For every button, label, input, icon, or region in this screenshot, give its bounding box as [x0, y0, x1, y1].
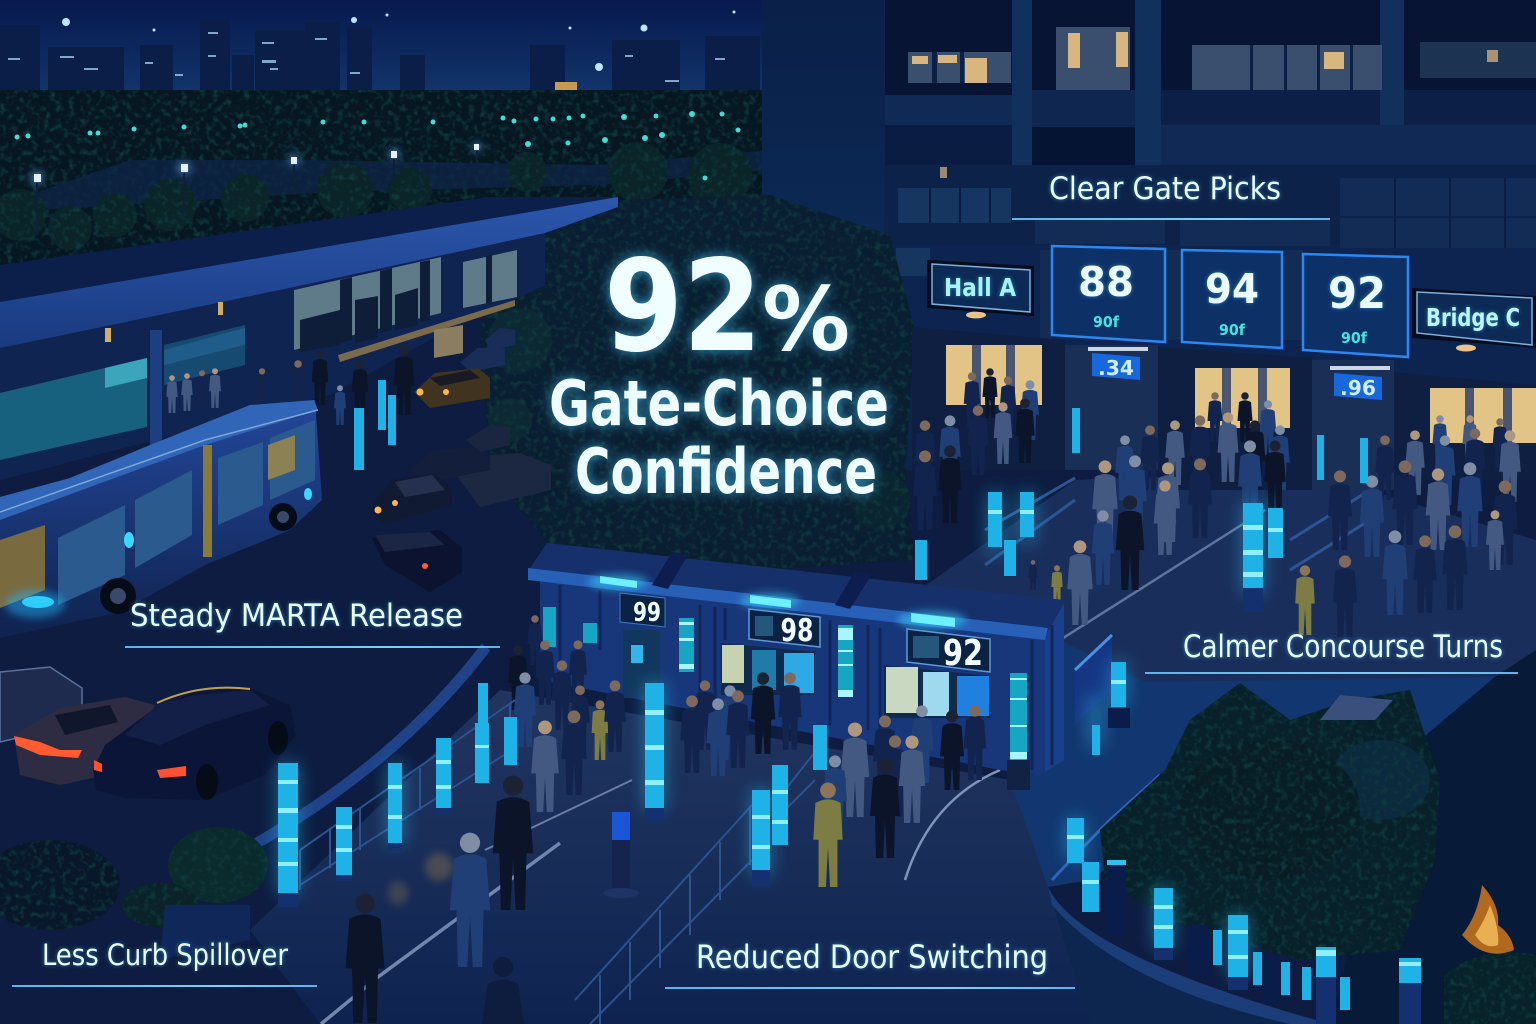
gate sign: Hall A: Hall A	[944, 273, 1017, 302]
booth building	[528, 543, 1064, 790]
caption: Steady MARTA Release: Steady MARTA Release	[130, 598, 463, 634]
lower windows	[896, 188, 1011, 276]
booth screen 98	[749, 609, 820, 649]
title: 92% Gate-Choice Confidence	[549, 232, 889, 508]
big stat: %	[762, 268, 850, 371]
building facade	[762, 0, 1536, 470]
score panel 94: 90f	[1219, 321, 1245, 339]
road cars	[368, 328, 551, 592]
door readout .34	[1092, 353, 1140, 380]
stat label: Confidence	[575, 435, 877, 508]
sidewalk sign behind tree	[1320, 695, 1393, 720]
crowd at booths	[508, 615, 986, 887]
big stat: 92	[604, 232, 762, 380]
tree line with lights	[0, 90, 770, 280]
score panel 88	[1052, 246, 1165, 342]
caption: Reduced Door Switching: Reduced Door Switching	[696, 938, 1048, 976]
booth screen 99: 99	[633, 598, 661, 628]
glowing bollards	[278, 380, 1421, 1024]
score panel 92: 92	[1328, 269, 1386, 319]
upper windows	[908, 27, 1382, 90]
station teal windows	[0, 325, 245, 460]
blue lamp post	[603, 812, 639, 898]
booth screen 92: 92	[943, 633, 983, 674]
lower right tree	[1100, 683, 1536, 1024]
upper right railing	[985, 478, 1370, 570]
curved walkways	[250, 470, 1536, 1024]
score panel 88: 88	[1078, 258, 1134, 306]
caption: Less Curb Spillover: Less Curb Spillover	[42, 938, 288, 972]
booth screen 92	[907, 629, 990, 674]
small flames at corner	[1462, 885, 1514, 954]
caption: Clear Gate Picks: Clear Gate Picks	[1049, 171, 1281, 207]
planters at lower left	[0, 827, 268, 960]
booth windows	[623, 630, 990, 718]
stat label: Gate-Choice	[549, 367, 889, 440]
roof light strips	[588, 574, 966, 629]
station lit windows	[294, 250, 517, 362]
door bays with signs and score panels	[912, 246, 1536, 490]
door readout .96: .96	[1340, 376, 1376, 400]
score panel 94	[1182, 250, 1282, 348]
gate sign: Hall A	[927, 260, 1034, 316]
score panel 88: 90f	[1093, 313, 1119, 331]
door readout .34: .34	[1098, 356, 1134, 380]
side railing right of booth	[1075, 635, 1112, 725]
station queue	[166, 345, 414, 425]
walkway railings	[300, 700, 815, 1024]
gate sign: Bridge C	[1412, 288, 1536, 348]
curb and low rail at lower right	[1048, 775, 1330, 1024]
door readout .96	[1334, 373, 1382, 400]
front parked cars	[0, 667, 296, 800]
crowd at concourse doors	[913, 368, 1521, 637]
station shelter	[0, 197, 618, 480]
booth side light strips	[543, 607, 1027, 760]
bus	[0, 400, 322, 638]
booth screen 98: 98	[780, 613, 814, 649]
score panel 92: 90f	[1341, 329, 1367, 347]
booth screen 99	[620, 593, 665, 628]
skyline and night sky	[0, 0, 770, 110]
stat label	[549, 367, 889, 508]
score panel 94: 94	[1205, 265, 1259, 313]
score panel 92	[1303, 254, 1408, 357]
central dark planting behind title	[480, 195, 915, 570]
foreground walkers	[346, 776, 533, 1024]
